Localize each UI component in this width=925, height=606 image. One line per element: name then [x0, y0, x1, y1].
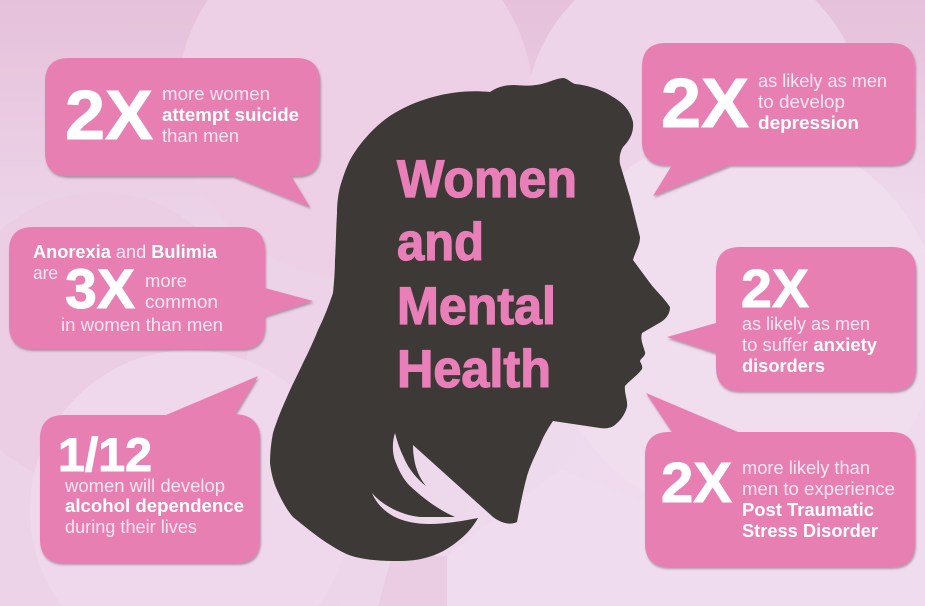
stat: 2X: 2X [661, 64, 749, 142]
text: women will develop alcohol dependence during their lives: during their lives [65, 517, 197, 537]
text: more women attempt suicide than men: attempt suicide [162, 105, 299, 125]
title: Women and Mental Health: Health [397, 340, 551, 399]
text: as likely as men to develop depression: as likely as men [758, 71, 887, 91]
speech bubble: post traumatic stress disorder [645, 393, 915, 567]
text: women will develop alcohol dependence during their lives: women will develop [64, 476, 225, 496]
title: Women and Mental Health: Mental [397, 277, 556, 336]
title: Women and Mental Health [397, 150, 577, 399]
text: more women attempt suicide than men [162, 84, 299, 146]
text: as likely as men to develop depression [758, 71, 887, 133]
text: more likely than men to experience Post Traumatic Stress Disorder: more likely than [742, 458, 870, 478]
text: as likely as men to suffer anxiety disorders: as likely as men [742, 314, 870, 334]
text: women will develop alcohol dependence during their lives [64, 476, 244, 537]
speech bubble: anorexia and bulimia [9, 227, 313, 349]
text: as likely as men to suffer anxiety disorders: disorders [742, 356, 825, 376]
text: more common in women than men: more [145, 271, 187, 291]
text: more common in women than men: common [145, 292, 218, 312]
speech bubble: alcohol dependence [40, 376, 260, 563]
text: as likely as men to suffer anxiety disorders: to suffer anxiety [742, 335, 877, 355]
stat: 2X: 2X [741, 259, 809, 319]
text: as likely as men to develop depression: depression [758, 113, 859, 133]
text: Anorexia and Bulimia: Anorexia and Bulimia [33, 242, 218, 262]
text: more likely than men to experience Post Traumatic Stress Disorder [742, 458, 895, 541]
text: more women attempt suicide than men: more women [162, 84, 270, 104]
stat: 2X: 2X [661, 451, 732, 515]
text: more likely than men to experience Post Traumatic Stress Disorder: Post Traumatic [742, 500, 874, 520]
speech bubble: attempt suicide [45, 58, 320, 207]
woman head silhouette [270, 78, 670, 561]
stat: 2X: 2X [65, 76, 153, 154]
title: Women and Mental Health: and [397, 213, 484, 272]
text: more likely than men to experience Post Traumatic Stress Disorder: men to experience [742, 479, 895, 499]
text: as likely as men to suffer anxiety disorders [742, 314, 877, 376]
speech bubble: depression [642, 43, 915, 196]
stat: 3X: 3X [65, 257, 135, 320]
text: women will develop alcohol dependence during their lives: alcohol dependence [65, 496, 244, 516]
text: more common in women than men [61, 271, 223, 335]
text: more women attempt suicide than men: than men [162, 126, 239, 146]
text: are: are [33, 263, 58, 283]
text: more likely than men to experience Post Traumatic Stress Disorder: Stress Disorder [742, 521, 878, 541]
stat: 1/12: 1/12 [58, 428, 152, 481]
title: Women and Mental Health: Women [397, 150, 577, 209]
text: more common in women than men: in women than men [61, 315, 223, 335]
speech bubble: anxiety disorders [667, 247, 916, 391]
text: as likely as men to develop depression: to develop [758, 92, 845, 112]
